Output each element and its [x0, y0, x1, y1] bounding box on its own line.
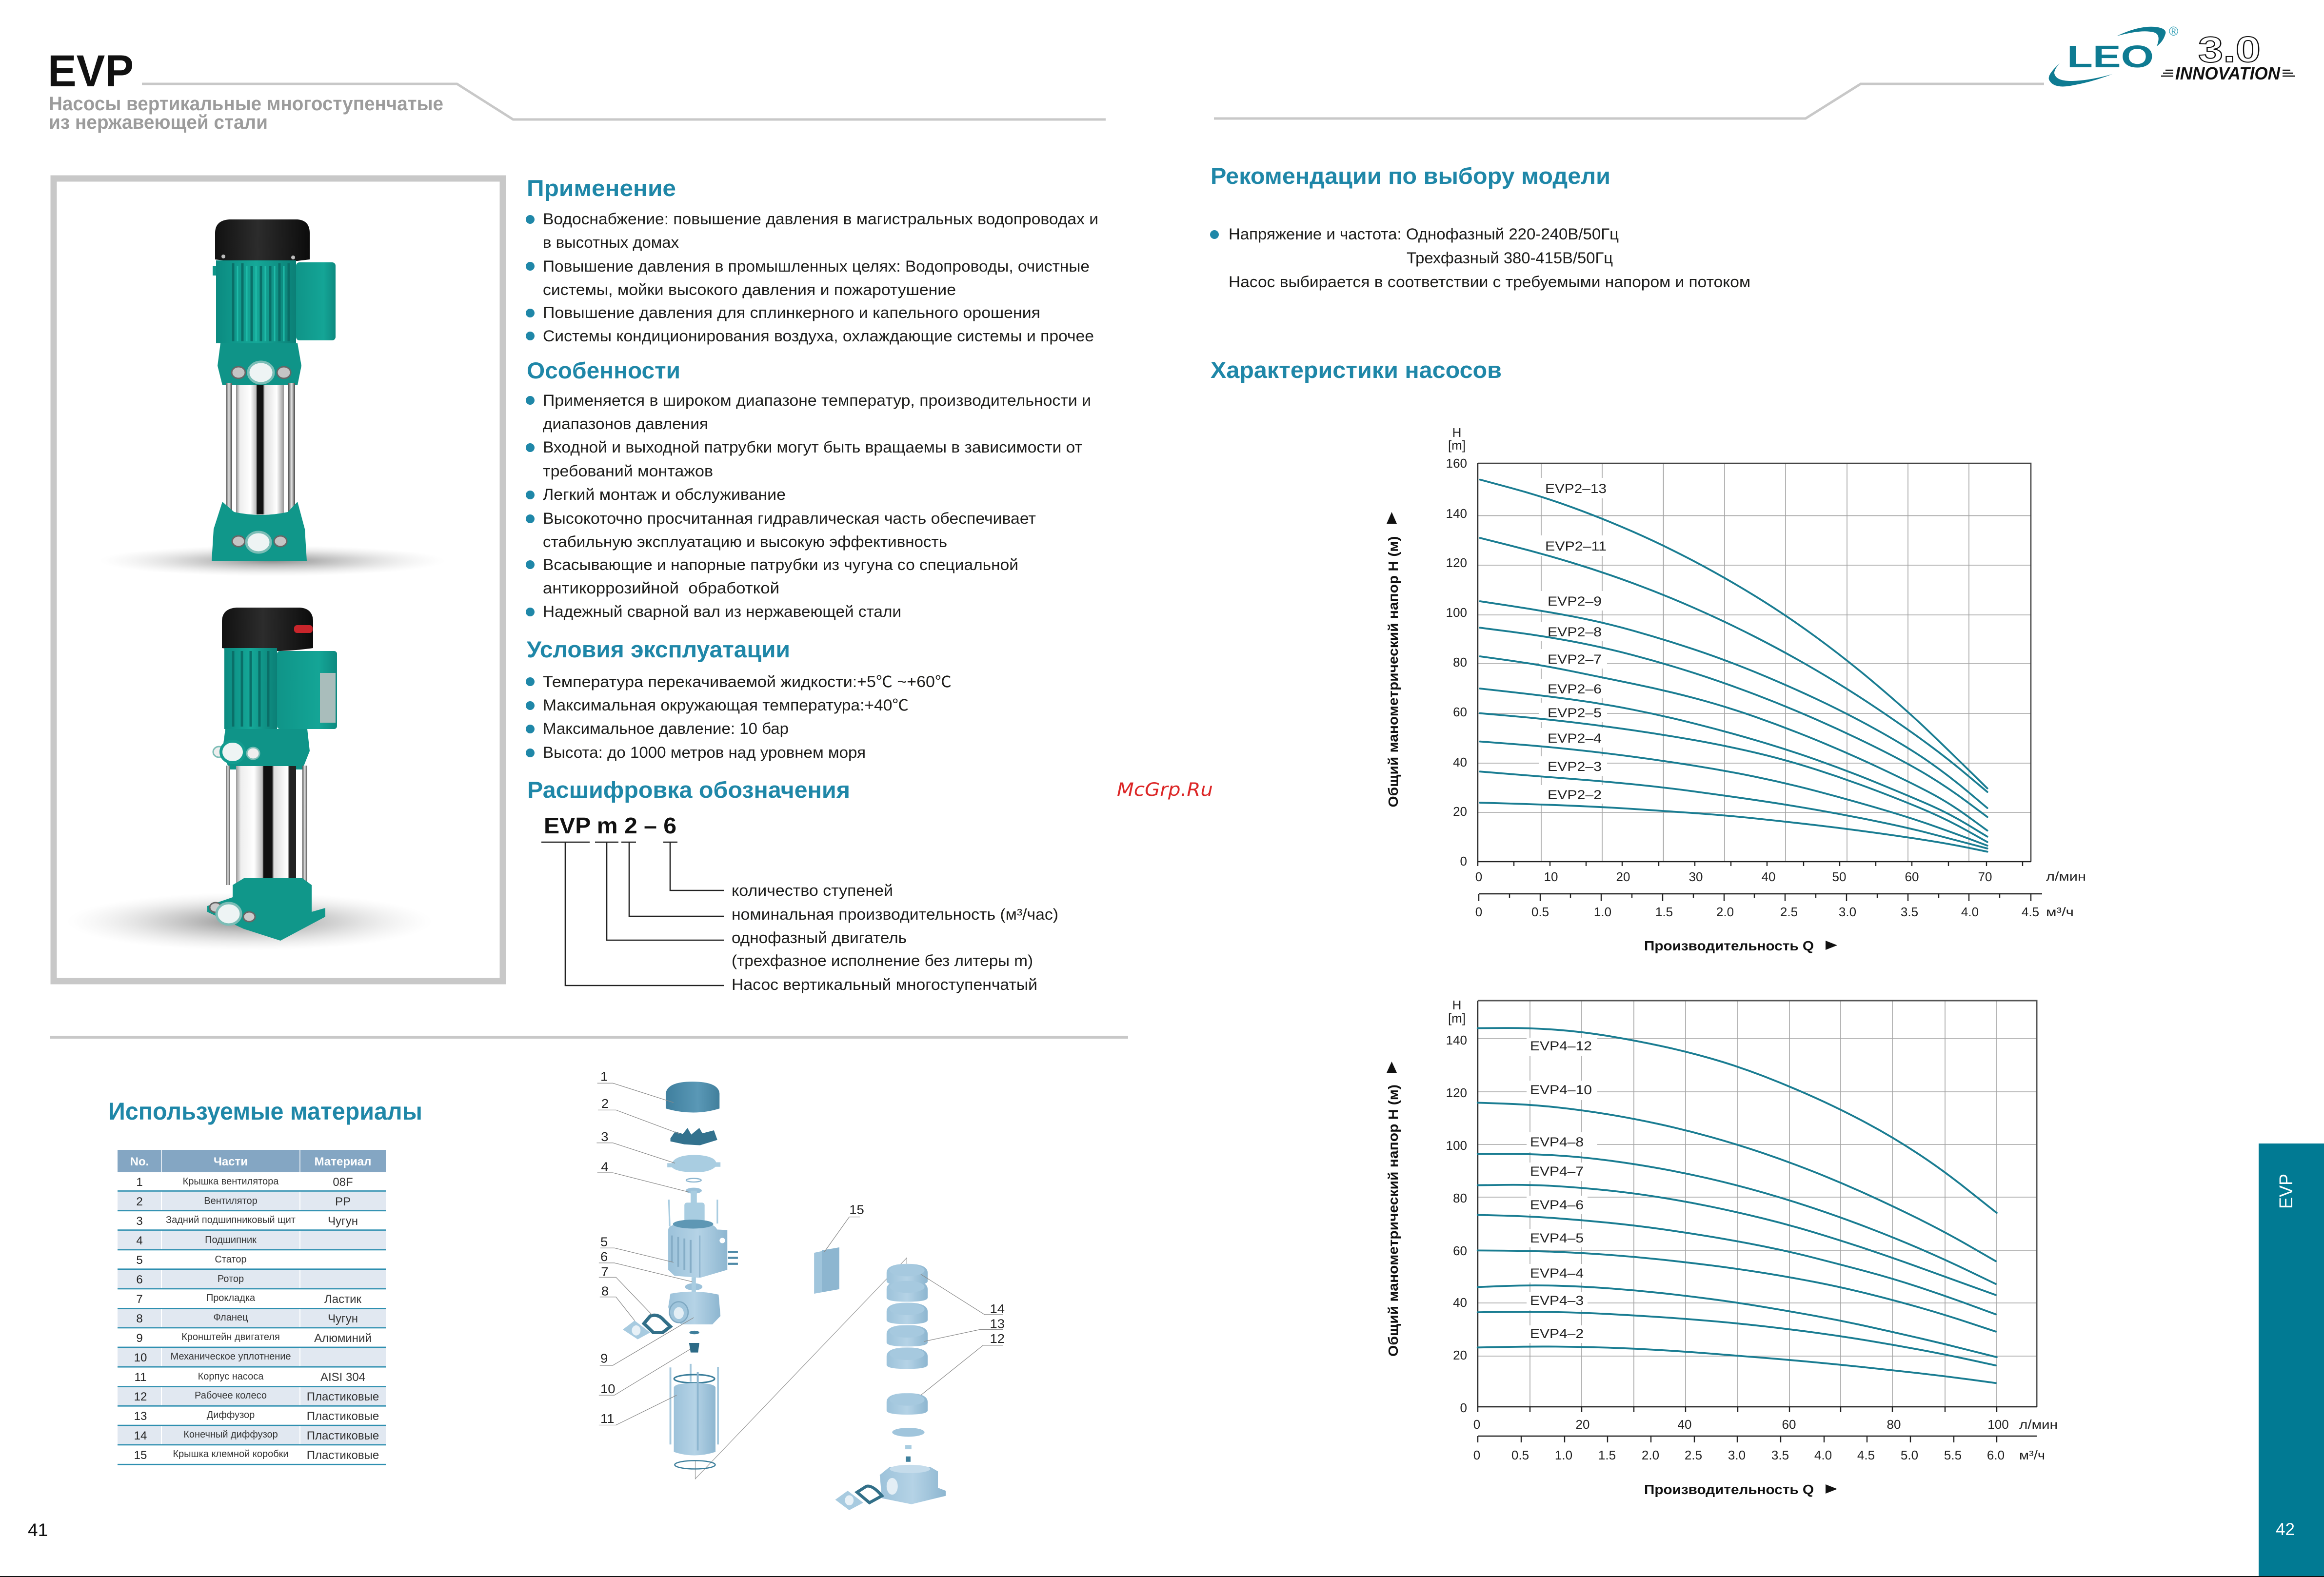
curve labels: [1530, 1039, 1592, 1341]
table: materials: Пластиковые: [307, 1449, 379, 1462]
curve labels: EVP4–6: [1530, 1198, 1584, 1212]
table: materials: Подшипник: [205, 1235, 257, 1245]
subtitle: из нержавеющей стали: [49, 112, 268, 133]
table: materials: Крышка клемной коробки: [173, 1449, 289, 1459]
x axis numbers: m3/h: м³/ч: [2019, 1448, 2045, 1462]
x axis numbers: m3/h: 1.5: [1598, 1448, 1616, 1462]
curve labels: EVP4–5: [1530, 1231, 1584, 1245]
text block: особенности: Легкий монтаж и обслуживание: [543, 486, 786, 503]
table: materials: Диффузор: [207, 1410, 255, 1420]
page number 41: 41: [28, 1520, 48, 1540]
table: materials: 8: [136, 1312, 143, 1325]
table: materials: Пластиковые: [307, 1390, 379, 1403]
part numbers: 1: [600, 1069, 608, 1084]
text block: условия эксплуатации: Температура перекачиваемой жидкости:+5℃ ~+60℃: [543, 673, 952, 690]
part 7: gasket: [644, 1315, 671, 1333]
y axis numbers: 20: [1453, 1348, 1467, 1362]
chart: EVP4 performance curves: [1386, 998, 2058, 1497]
curve labels: EVP4–8: [1530, 1135, 1584, 1149]
table: materials: Пластиковые: [307, 1429, 379, 1442]
part 5: stator housing: [668, 1200, 738, 1278]
text block: применение: Повышение давления для сплинкерного и капельного орошения: [543, 304, 1040, 321]
text block: применение: Системы кондиционирования воздуха, охлаждающие системы и прочее: [543, 327, 1094, 345]
model code diagram: (трехфазное исполнение без литеры m): [732, 952, 1033, 969]
model code diagram: [541, 813, 1058, 993]
y axis numbers: 40: [1453, 1295, 1467, 1310]
part 10: mechanical seal: [689, 1331, 699, 1353]
x axis numbers: m3/h: 2.0: [1716, 905, 1734, 919]
text block: условия эксплуатации: Максимальная окружающая температура:+40℃: [543, 696, 909, 714]
table: materials: Чугун: [328, 1215, 358, 1228]
y axis numbers: 80: [1453, 1191, 1467, 1205]
part numbers: 10: [600, 1381, 616, 1396]
side tab: EVP: [2276, 1174, 2297, 1209]
panel: product photo frame: [54, 178, 503, 981]
text block: особенности: диапазонов давления: [543, 415, 708, 433]
table: materials: Чугун: [328, 1312, 358, 1325]
text block: особенности: стабильную эксплуатацию и высокую эффективность: [543, 533, 947, 551]
table: materials: Фланец: [214, 1312, 248, 1323]
text block: условия эксплуатации: Высота: до 1000 метров над уровнем моря: [543, 744, 866, 761]
curve labels: EVP4–2: [1530, 1326, 1584, 1341]
x axis numbers: l/min: 40: [1678, 1417, 1691, 1432]
subtitle: Насосы вертикальные многоступенчатые: [49, 93, 443, 115]
curve labels: EVP4–3: [1530, 1293, 1584, 1308]
part 1: fan cover: [666, 1082, 719, 1113]
text block: особенности: Всасывающие и напорные патрубки из чугуна со специальной: [543, 556, 1018, 573]
y axis numbers: 100: [1446, 605, 1467, 620]
part numbers: 4: [601, 1160, 609, 1174]
table: materials: Вентилятор: [204, 1196, 258, 1206]
text block: особенности: требований монтажов: [543, 462, 713, 480]
x axis numbers: l/min: 0: [1475, 869, 1482, 884]
part numbers: 7: [601, 1264, 609, 1279]
curve labels: EVP4–4: [1530, 1266, 1584, 1281]
part 11: pump body: [671, 1364, 718, 1469]
y axis numbers: 60: [1453, 1243, 1467, 1258]
x axis numbers: m3/h: 6.0: [1987, 1448, 2005, 1462]
curve labels: [1545, 481, 1607, 802]
table: materials: Кронштейн двигателя: [181, 1332, 280, 1342]
unit: H [m]: [m]: [1448, 1011, 1466, 1025]
unit: H [m]: H: [1452, 998, 1461, 1012]
y axis title: Общий манометрический напор H (м): [1386, 536, 1401, 808]
x axis numbers: m3/h: 2.5: [1685, 1448, 1702, 1462]
part numbers: 12: [990, 1332, 1005, 1346]
logo: LEO: LEO: [2067, 39, 2154, 74]
x axis numbers: l/min: 40: [1762, 869, 1775, 884]
table: materials: Статор: [215, 1254, 247, 1265]
x axis numbers: m3/h: 2.0: [1642, 1448, 1659, 1462]
logo: LEO: [2049, 24, 2178, 86]
part numbers: 6: [600, 1250, 608, 1264]
part 9: motor bracket: [668, 1292, 720, 1324]
part numbers: 5: [600, 1235, 608, 1249]
text block: условия эксплуатации: Максимальное давление: 10 бар: [543, 720, 789, 737]
x axis numbers: l/min: л/мин: [2019, 1417, 2058, 1432]
x axis numbers: m3/h: м³/ч: [2046, 905, 2074, 919]
table: materials: [118, 1150, 386, 1464]
part 4: bearing and shaft: [686, 1179, 702, 1205]
table: materials: Пластиковые: [307, 1410, 379, 1423]
x axis numbers: m3/h: 5.0: [1901, 1448, 1918, 1462]
part 15: terminal box cover: [814, 1247, 839, 1294]
text block: условия эксплуатации: [526, 673, 952, 761]
text block: особенности: Применяется в широком диапазоне температур, производительности и: [543, 392, 1091, 409]
table: materials: 4: [136, 1234, 143, 1247]
x axis numbers: l/min: 0: [1473, 1417, 1480, 1432]
x axis numbers: l/min: 20: [1616, 869, 1630, 884]
part 6: rotor bearing: [685, 1277, 702, 1300]
x axis numbers: m3/h: 0: [1475, 905, 1482, 919]
x axis numbers: l/min: 80: [1887, 1417, 1901, 1432]
heading: используемые материалы: Используемые материалы: [108, 1098, 422, 1125]
table: materials: 1: [136, 1176, 143, 1189]
part numbers: 3: [601, 1130, 609, 1144]
pump photo 1: [99, 219, 445, 576]
exploded view diagram: [596, 1069, 1005, 1510]
table: materials: Рабочее колесо: [195, 1390, 267, 1401]
y axis numbers: [1446, 456, 1467, 868]
x axis numbers: l/min: 60: [1905, 869, 1919, 884]
model code diagram: Насос вертикальный многоступенчатый: [732, 976, 1037, 993]
text block: применение: в высотных домах: [543, 234, 679, 251]
x axis numbers: m3/h: 1.0: [1555, 1448, 1572, 1462]
part numbers: 13: [990, 1317, 1005, 1331]
x axis numbers: l/min: 50: [1832, 869, 1846, 884]
x axis numbers: m3/h: 0.5: [1511, 1448, 1529, 1462]
leader lines: [596, 1083, 1003, 1425]
table: materials: Алюминий: [314, 1332, 372, 1345]
table: materials: Крышка вентилятора: [183, 1176, 279, 1187]
x axis numbers: l/min: 60: [1782, 1417, 1796, 1432]
part numbers: 2: [601, 1097, 609, 1111]
table: materials: 13: [134, 1410, 147, 1423]
heading: расшифровка обозначения: Расшифровка обозначения: [527, 777, 850, 803]
y axis numbers: 0: [1460, 854, 1467, 868]
x axis numbers: m3/h: 3.5: [1771, 1448, 1789, 1462]
y axis title: Общий манометрический напор H (м): [1386, 1084, 1401, 1357]
y axis numbers: 120: [1446, 555, 1467, 570]
table: materials: Ластик: [324, 1293, 361, 1306]
heading: применение: Применение: [527, 175, 676, 201]
curve labels: EVP2–7: [1548, 652, 1602, 667]
curve labels: EVP2–3: [1548, 759, 1602, 774]
subtitle: [49, 93, 443, 133]
y axis numbers: 0: [1460, 1400, 1467, 1415]
pump base: [835, 1465, 946, 1510]
y axis numbers: 120: [1446, 1085, 1467, 1100]
curves: [1478, 1028, 1997, 1383]
x axis numbers: m3/h: 0: [1473, 1448, 1480, 1462]
table: materials: 11: [135, 1371, 146, 1384]
text block: особенности: Входной и выходной патрубки могут быть вращаемы в зависимости от: [543, 438, 1082, 456]
side tab: 42: [2276, 1520, 2295, 1539]
part numbers: 8: [601, 1284, 609, 1299]
table: materials: AISI 304: [320, 1371, 365, 1384]
table: materials: 10: [134, 1351, 147, 1364]
curve labels: EVP2–8: [1548, 625, 1602, 639]
y axis numbers: 160: [1446, 456, 1467, 471]
parts 12-14: stage stack: [887, 1264, 928, 1462]
part numbers: 11: [600, 1412, 614, 1426]
pump photo 2: [67, 608, 433, 951]
table: materials: 6: [136, 1273, 143, 1286]
curve labels: EVP2–6: [1548, 682, 1602, 696]
table: materials: 08F: [333, 1176, 353, 1189]
table: materials: 15: [134, 1449, 147, 1462]
model code diagram: количество ступеней: [732, 882, 893, 899]
heading: условия эксплуатации: Условия эксплуатации: [527, 636, 790, 662]
table: materials: Части: [214, 1155, 248, 1168]
x axis numbers: m3/h: 3.0: [1728, 1448, 1746, 1462]
curve labels: EVP2–2: [1548, 788, 1602, 802]
part numbers: [600, 1069, 1005, 1426]
model code diagram: номинальная производительность (м³/час): [732, 906, 1058, 923]
logo: 3.0 innovation: 3.0: [2198, 29, 2261, 70]
curve labels: EVP4–12: [1530, 1039, 1592, 1053]
text block: применение: [526, 210, 1098, 345]
heading: рекомендации: Рекомендации по выбору модели: [1211, 163, 1610, 189]
table: materials: Прокладка: [206, 1293, 256, 1303]
x axis numbers: l/min: 70: [1978, 869, 1992, 884]
heading: характеристики насосов: Характеристики насосов: [1211, 357, 1502, 383]
text block: особенности: Надежный сварной вал из нержавеющей стали: [543, 603, 901, 620]
title: EVP: EVP: [48, 46, 134, 96]
curve labels: EVP2–11: [1545, 539, 1607, 553]
text block: рекомендации: [1210, 225, 1750, 291]
part 2: fan: [671, 1128, 717, 1145]
heading: особенности: Особенности: [527, 357, 680, 383]
unit: H [m]: [1448, 425, 1466, 453]
table: materials: 14: [134, 1429, 147, 1442]
table: materials: Конечный диффузор: [183, 1429, 278, 1440]
side tab: [2259, 1143, 2324, 1576]
model code diagram: однофазный двигатель: [732, 929, 907, 946]
text block: рекомендации: Напряжение и частота: Однофазный 220-240В/50Гц: [1229, 225, 1619, 243]
x axis numbers: m3/h: 4.5: [2022, 905, 2039, 919]
watermark: McGrp.Ru: [1117, 779, 1213, 800]
x axis numbers: l/min: л/мин: [2046, 869, 2086, 884]
text block: особенности: [526, 392, 1091, 620]
text block: особенности: Высокоточно просчитанная гидравлическая часть обеспечивает: [543, 510, 1036, 527]
table: materials: 7: [136, 1293, 143, 1306]
x axis numbers: m3/h: 4.0: [1814, 1448, 1832, 1462]
x axis numbers: m3/h: 4.0: [1961, 905, 1979, 919]
x axis numbers: m3/h: [1475, 905, 2074, 919]
x axis numbers: l/min: 10: [1544, 869, 1558, 884]
y axis numbers: [1446, 1033, 1467, 1415]
text block: особенности: антикоррозийной обработкой: [543, 579, 779, 597]
logo: 3.0 innovation: [2161, 29, 2295, 83]
text block: рекомендации: Насос выбирается в соответствии с требуемыми напором и потоком: [1229, 273, 1750, 291]
curve labels: EVP2–9: [1548, 594, 1602, 609]
unit: H [m]: H: [1452, 425, 1461, 440]
chart: EVP2 performance curves: [1386, 425, 2086, 953]
y axis numbers: 140: [1446, 1033, 1467, 1047]
x axis numbers: m3/h: 4.5: [1857, 1448, 1875, 1462]
y axis numbers: 20: [1453, 804, 1467, 819]
pipe port: [670, 1302, 688, 1322]
table: materials: No.: [130, 1155, 149, 1168]
y axis numbers: 60: [1453, 705, 1467, 719]
x axis numbers: l/min: 100: [1987, 1417, 2009, 1432]
table: materials: 3: [136, 1215, 143, 1228]
curve labels: EVP2–5: [1548, 706, 1602, 720]
x axis numbers: l/min: 30: [1689, 869, 1703, 884]
x axis numbers: l/min: [1475, 869, 2086, 884]
y axis numbers: 100: [1446, 1138, 1467, 1153]
x axis numbers: l/min: 20: [1576, 1417, 1589, 1432]
curve labels: EVP2–4: [1548, 731, 1602, 746]
x axis numbers: m3/h: 3.0: [1839, 905, 1856, 919]
part numbers: 14: [990, 1301, 1005, 1316]
x axis numbers: m3/h: 3.5: [1901, 905, 1918, 919]
table: materials: Задний подшипниковый щит: [166, 1215, 296, 1225]
text block: применение: Повышение давления в промышленных целях: Водопроводы, очистные: [543, 257, 1090, 275]
curve labels: EVP4–7: [1530, 1164, 1584, 1179]
table: materials: 5: [136, 1254, 143, 1267]
table: materials: 12: [134, 1390, 147, 1403]
unit: H [m]: [m]: [1448, 438, 1466, 453]
text block: применение: системы, мойки высокого давления и пожаротушение: [543, 281, 956, 298]
logo: LEO: ®: [2169, 24, 2178, 39]
x axis numbers: m3/h: 1.0: [1594, 905, 1611, 919]
model code diagram: EVP m 2 – 6: [544, 813, 676, 838]
y axis numbers: 80: [1453, 655, 1467, 670]
x axis numbers: l/min: [1473, 1417, 2058, 1432]
x axis numbers: m3/h: 1.5: [1655, 905, 1673, 919]
x axis title: Производительность Q: [1644, 1482, 1814, 1497]
curve labels: EVP4–10: [1530, 1083, 1592, 1097]
table: materials: 9: [136, 1332, 143, 1345]
part 8: flange: [623, 1321, 650, 1340]
x axis numbers: m3/h: [1473, 1448, 2045, 1462]
y axis numbers: 140: [1446, 506, 1467, 521]
table: materials: Ротор: [218, 1274, 244, 1284]
text block: применение: Водоснабжение: повышение давления в магистральных водопроводах и: [543, 210, 1098, 228]
part 3: rear shield: [667, 1155, 720, 1172]
part numbers: 15: [849, 1202, 864, 1217]
x axis numbers: m3/h: 2.5: [1780, 905, 1798, 919]
logo: 3.0 innovation: INNOVATION: [2175, 63, 2281, 83]
x axis numbers: m3/h: 5.5: [1944, 1448, 1962, 1462]
y axis numbers: 40: [1453, 755, 1467, 769]
x axis title: Производительность Q: [1644, 938, 1814, 953]
unit: H [m]: [1448, 998, 1466, 1025]
table: materials: Корпус насоса: [198, 1371, 264, 1382]
curves: [1480, 480, 1987, 852]
x axis numbers: m3/h: 0.5: [1531, 905, 1549, 919]
table: materials: Материал: [315, 1155, 371, 1168]
text block: рекомендации: Трехфазный 380-415В/50Гц: [1407, 249, 1613, 267]
table: materials: PP: [335, 1195, 351, 1208]
table: materials: Механическое уплотнение: [170, 1351, 291, 1362]
part numbers: 9: [600, 1351, 608, 1365]
curve labels: EVP2–13: [1545, 481, 1607, 496]
table: materials: 2: [136, 1195, 143, 1208]
